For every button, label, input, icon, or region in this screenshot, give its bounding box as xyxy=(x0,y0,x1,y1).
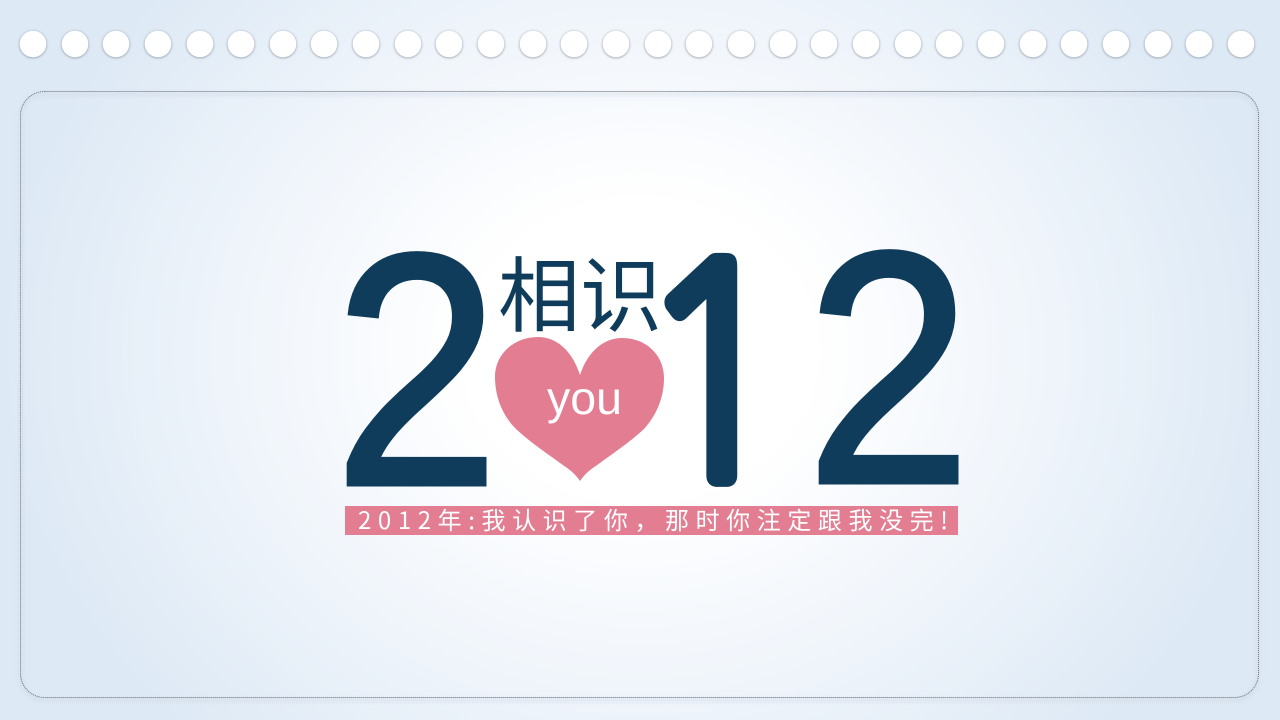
banner background xyxy=(345,506,958,535)
heading: 相识: 相识 xyxy=(498,230,662,349)
icon: heart xyxy=(495,337,664,481)
heart with you xyxy=(495,337,664,481)
big year digit 2 right: 2 xyxy=(806,183,971,552)
banner xyxy=(345,501,958,536)
heart label: you xyxy=(547,372,622,424)
big year digit 1: 1 xyxy=(633,228,794,522)
big year digit 2 left: 2 xyxy=(334,185,499,554)
banner text: 2012年:我认识了你，那时你注定跟我没完! xyxy=(358,501,948,536)
binder holes row xyxy=(20,31,1254,57)
